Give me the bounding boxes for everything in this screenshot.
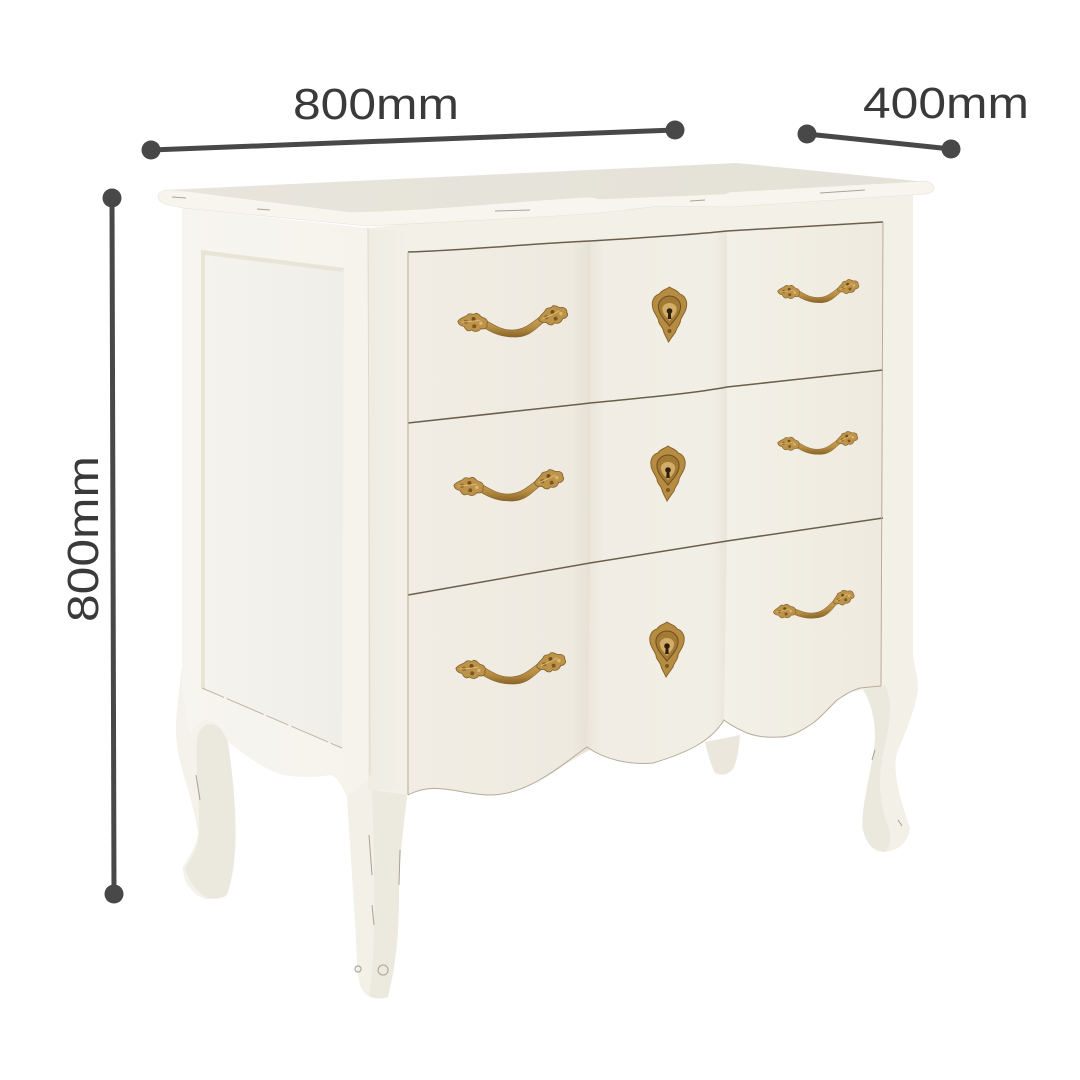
top edge distress marks: [172, 190, 865, 211]
side panel inset: [201, 250, 344, 748]
right leg shading: [863, 685, 890, 852]
corner edge: [368, 228, 370, 775]
front left post: [368, 230, 408, 790]
dimension: depth 400mm: 400mm: [863, 79, 1029, 128]
brass handles: [453, 278, 860, 684]
top front lip: [158, 181, 934, 226]
middle drawer: [408, 370, 883, 594]
leg distress marks: [196, 750, 902, 925]
front frame with front left leg and right leg: [347, 195, 918, 999]
front left leg shading: [369, 790, 407, 998]
dimension: width 800mm: 800mm: [293, 80, 459, 129]
side panel: [182, 208, 372, 797]
top drawer: [408, 222, 883, 422]
keyhole plates: [650, 287, 687, 677]
chest of drawers: [158, 163, 934, 999]
top surface: [165, 163, 927, 214]
rear left leg: [176, 670, 236, 899]
foot scrolls: [355, 965, 388, 975]
bottom drawer: [408, 517, 881, 795]
back right leg: [705, 735, 740, 775]
dimension: width 800mm: [142, 80, 684, 160]
dimension: height 800mm: [59, 188, 124, 904]
dimension: depth 400mm: [798, 79, 1029, 158]
dimension: height 800mm: 800mm: [59, 456, 108, 622]
drawer seams: [408, 222, 883, 595]
